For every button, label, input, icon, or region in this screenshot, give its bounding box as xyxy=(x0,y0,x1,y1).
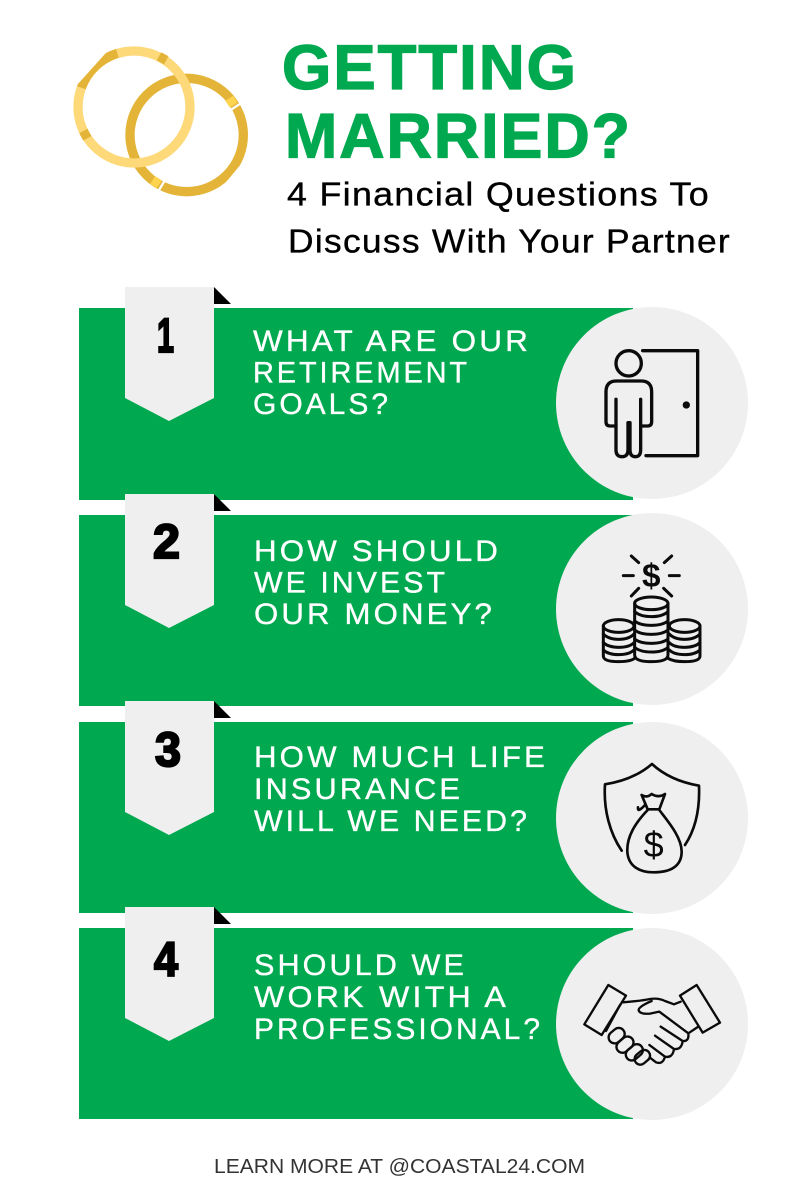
title xyxy=(282,33,632,172)
question text 3: INSURANCE xyxy=(254,773,463,806)
question text 4: PROFESSIONAL? xyxy=(254,1013,543,1046)
question text 3 xyxy=(254,741,548,838)
icon: shield with money bag: $ xyxy=(644,824,664,865)
number ribbon 1: 1 xyxy=(157,310,174,363)
number ribbon 2: 2 xyxy=(153,516,180,569)
question text 1 xyxy=(253,325,531,421)
question text 4: SHOULD WE xyxy=(254,949,467,982)
panel: question 1 xyxy=(79,287,748,500)
title: MARRIED? xyxy=(285,102,632,172)
question text 1: RETIREMENT xyxy=(253,356,470,390)
question text 2: HOW SHOULD xyxy=(254,535,501,568)
number ribbon 4 xyxy=(125,907,214,1041)
number ribbon 4: 4 xyxy=(154,934,178,987)
number ribbon 1 xyxy=(125,287,214,421)
icon: shield with money bag xyxy=(605,764,699,872)
panel: question 3 xyxy=(79,701,748,914)
subtitle: 4 Financial Questions To xyxy=(287,176,710,213)
number ribbon 3: 3 xyxy=(155,724,181,777)
subtitle: Discuss With Your Partner xyxy=(288,223,731,260)
question text 4 xyxy=(254,949,543,1046)
icon: coin stacks with dollar: $ xyxy=(642,558,661,595)
icon: handshake xyxy=(584,985,720,1067)
question text 2 xyxy=(254,535,501,631)
panel: question 2 xyxy=(79,494,748,706)
question text 2: WE INVEST xyxy=(254,566,448,600)
panel: question 4 xyxy=(79,907,748,1120)
icon: person beside door xyxy=(606,351,698,457)
question text 3: WILL WE NEED? xyxy=(254,805,530,838)
question text 1: WHAT ARE OUR xyxy=(253,325,531,358)
question text 2: OUR MONEY? xyxy=(254,598,495,631)
title: GETTING xyxy=(282,33,578,103)
number ribbon 3 xyxy=(125,701,214,835)
icon: coin stacks with dollar xyxy=(603,556,700,662)
question text 4: WORK WITH A xyxy=(254,981,509,1014)
footer: LEARN MORE AT @COASTAL24.COM xyxy=(214,1156,585,1178)
question text 3: HOW MUCH LIFE xyxy=(254,741,548,774)
question text 1: GOALS? xyxy=(253,388,391,421)
subtitle xyxy=(287,176,731,260)
icon: interlocked gold wedding rings xyxy=(70,43,260,193)
number ribbon 2 xyxy=(125,494,214,628)
